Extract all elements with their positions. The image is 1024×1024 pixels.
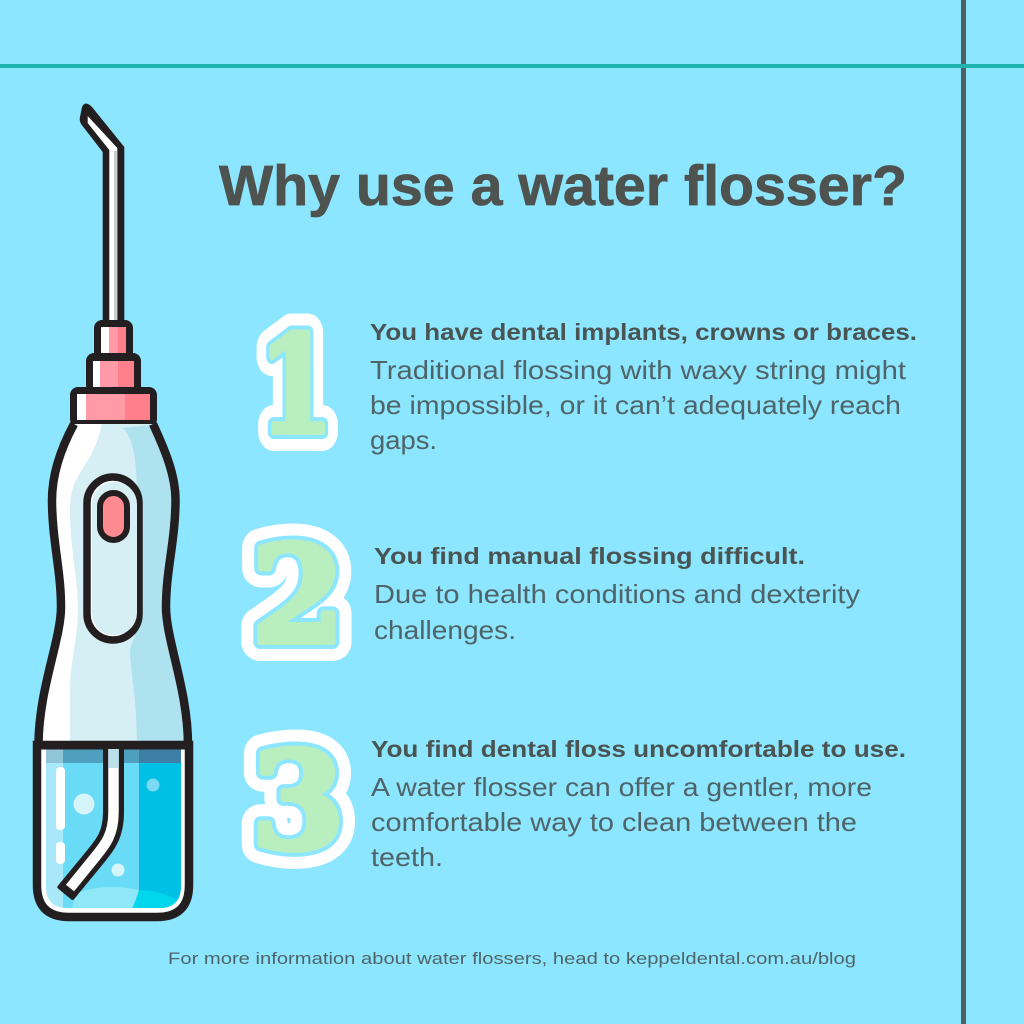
point 2 text: You find manual flossing difficult. — [374, 543, 805, 569]
point 1 text: You have dental implants, crowns or braces. — [370, 319, 917, 345]
point 1 text: Traditional flossing with waxy string might — [370, 355, 907, 385]
flosser handle — [30, 420, 200, 750]
number 1: 1 — [259, 306, 333, 464]
point 2 text: Due to health conditions and dexterity — [374, 579, 860, 609]
footer note: For more information about water flossers, head to keppeldental.com.au/blog — [168, 949, 856, 968]
nozzle tip — [80, 104, 124, 322]
number 3: 3 — [251, 722, 345, 880]
point 1 text: be impossible, or it can’t adequately reach — [370, 390, 901, 420]
internal water tube — [59, 749, 119, 898]
title: Why use a water flosser? — [219, 154, 907, 218]
number 1: 1 — [259, 306, 333, 464]
number 2: 2 — [251, 516, 345, 674]
point 1 text — [370, 319, 917, 455]
number 1: 1 — [259, 306, 333, 464]
water tank — [33, 742, 193, 917]
point 3 text: You find dental floss uncomfortable to use. — [371, 736, 906, 762]
number 2: 2 — [251, 516, 345, 674]
point 3 text — [371, 736, 906, 872]
point 2 text — [374, 543, 860, 645]
number 3: 3 — [251, 722, 345, 880]
point 2 text: challenges. — [374, 615, 516, 645]
nozzle collars — [70, 320, 157, 427]
number 2: 2 — [251, 516, 345, 674]
number 3: 3 — [251, 722, 345, 880]
point 3 text: teeth. — [371, 842, 443, 872]
point 3 text: A water flosser can offer a gentler, more — [371, 772, 872, 802]
icon: water flosser — [30, 104, 200, 917]
point 3 text: comfortable way to clean between the — [371, 807, 857, 837]
point 1 text: gaps. — [370, 425, 437, 455]
handle button — [87, 477, 139, 640]
